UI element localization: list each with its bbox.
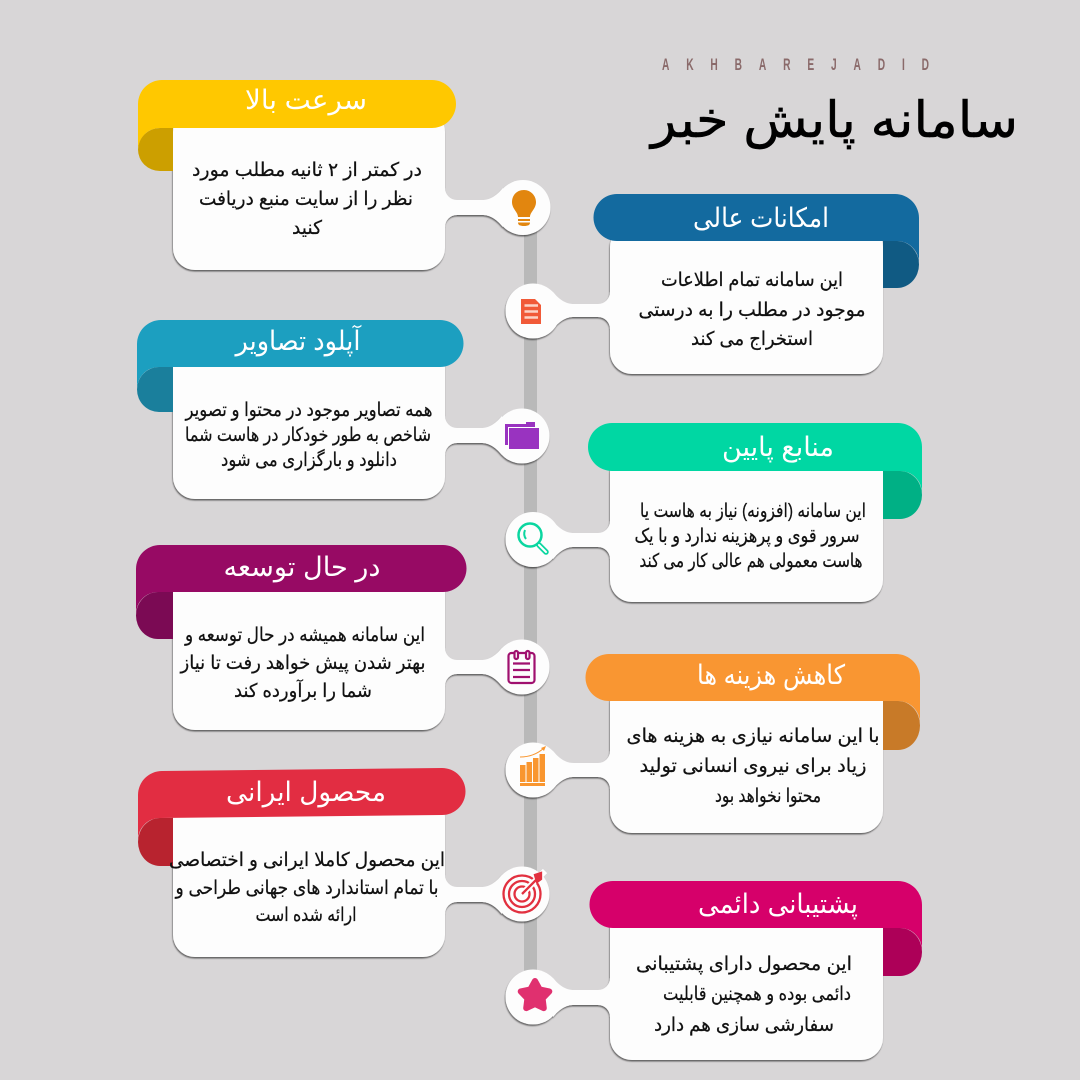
ribbon header (585, 654, 920, 723)
body text: نظر را از سایت منبع دریافت (199, 189, 413, 210)
body text: کنید (292, 218, 323, 239)
ribbon header (588, 423, 922, 493)
ribbon fold (138, 818, 173, 866)
body text: شاخص به طور خودکار در هاست شما (185, 425, 431, 446)
timeline bar (524, 225, 537, 1000)
panel: in development (136, 545, 550, 730)
heading: منابع پایین (722, 432, 834, 463)
body text (192, 160, 422, 239)
icon: growth chart (520, 746, 546, 786)
ribbon header (138, 80, 456, 150)
body text: این سامانه همیشه در حال توسعه و (184, 625, 425, 646)
body text: محتوا نخواهد بود (715, 786, 821, 807)
body text (636, 954, 852, 1036)
icon: magnifier (518, 524, 546, 552)
panel: image upload (137, 320, 550, 499)
card body with connector and icon disc (173, 570, 550, 730)
icon: folder (505, 422, 539, 450)
body text: با این سامانه نیازی به هزینه های (626, 726, 880, 747)
ribbon header (136, 545, 466, 614)
card body with connector and icon disc (173, 345, 550, 499)
ribbon fold (883, 928, 922, 976)
panel: great features (506, 194, 919, 374)
ribbon fold (136, 592, 173, 639)
panel: high speed (138, 80, 550, 270)
body text: با تمام استاندارد های جهانی طراحی و (175, 878, 438, 899)
body text: دائمی بوده و همچنین قابلیت (663, 984, 851, 1005)
ribbon fold (138, 128, 173, 171)
body text: استخراج می کند (691, 329, 813, 350)
title: سامانه پایش خبر (648, 92, 1018, 149)
heading: سرعت بالا (245, 85, 367, 116)
body text: موجود در مطلب را به درستی (638, 300, 866, 321)
heading: کاهش هزینه ها (697, 660, 845, 691)
card body with connector and icon disc (506, 450, 883, 602)
card body with connector and icon disc (506, 225, 883, 374)
brand label: AKHBAREJADID (662, 54, 929, 74)
body text: این سامانه (افزونه) نیاز به هاست یا (640, 501, 866, 522)
ribbon header (593, 194, 919, 263)
panel: cost reduction (506, 654, 920, 833)
panel: low resources (506, 423, 922, 602)
card body with connector and icon disc (173, 110, 550, 270)
body text (638, 270, 866, 350)
panel: permanent support (506, 881, 922, 1060)
body text: این محصول کاملا ایرانی و اختصاصی (169, 850, 445, 871)
heading: محصول ایرانی (226, 777, 386, 808)
body text (634, 501, 866, 572)
panel: Iranian product (138, 768, 550, 957)
body text: شما را برآورده کند (234, 678, 372, 702)
ribbon header (138, 768, 465, 840)
ribbon header (590, 881, 922, 950)
body text (169, 850, 445, 926)
body text: همه تصاویر موجود در محتوا و تصویر (185, 400, 432, 421)
body text: سفارشی سازی هم دارد (654, 1015, 834, 1036)
body text (180, 625, 426, 702)
card body with connector and icon disc (173, 795, 550, 957)
body text: سرور قوی و پرهزینه ندارد و با یک (634, 526, 860, 547)
body text: این محصول دارای پشتیبانی (636, 954, 852, 975)
ribbon header (137, 320, 464, 389)
body text: دانلود و بارگزاری می شود (221, 448, 397, 471)
ribbon fold (883, 241, 919, 288)
body text: زیاد برای نیروی انسانی تولید (640, 756, 866, 777)
heading: پشتیبانی دائمی (698, 889, 858, 920)
body text: در کمتر از ۲ ثانیه مطلب مورد (192, 160, 422, 181)
heading: در حال توسعه (224, 552, 380, 583)
icon: star (521, 981, 549, 1008)
body text (185, 400, 432, 471)
body text: این سامانه تمام اطلاعات (661, 270, 843, 291)
ribbon fold (883, 701, 920, 750)
heading: آپلود تصاویر (234, 325, 362, 357)
icon: document (521, 299, 541, 324)
ribbon fold (137, 367, 173, 412)
body text (626, 726, 880, 807)
heading: امکانات عالی (693, 203, 829, 233)
ribbon fold (883, 471, 922, 519)
card body with connector and icon disc (506, 905, 883, 1060)
body text: هاست معمولی هم عالی کار می کند (640, 551, 862, 572)
card body with connector and icon disc (506, 680, 883, 833)
body text: بهتر شدن پیش خواهد رفت تا نیاز (180, 653, 426, 674)
icon: notebook (508, 651, 534, 683)
icon: target with arrow (504, 871, 545, 912)
icon: light bulb (512, 190, 536, 226)
body text: ارائه شده است (256, 905, 356, 926)
